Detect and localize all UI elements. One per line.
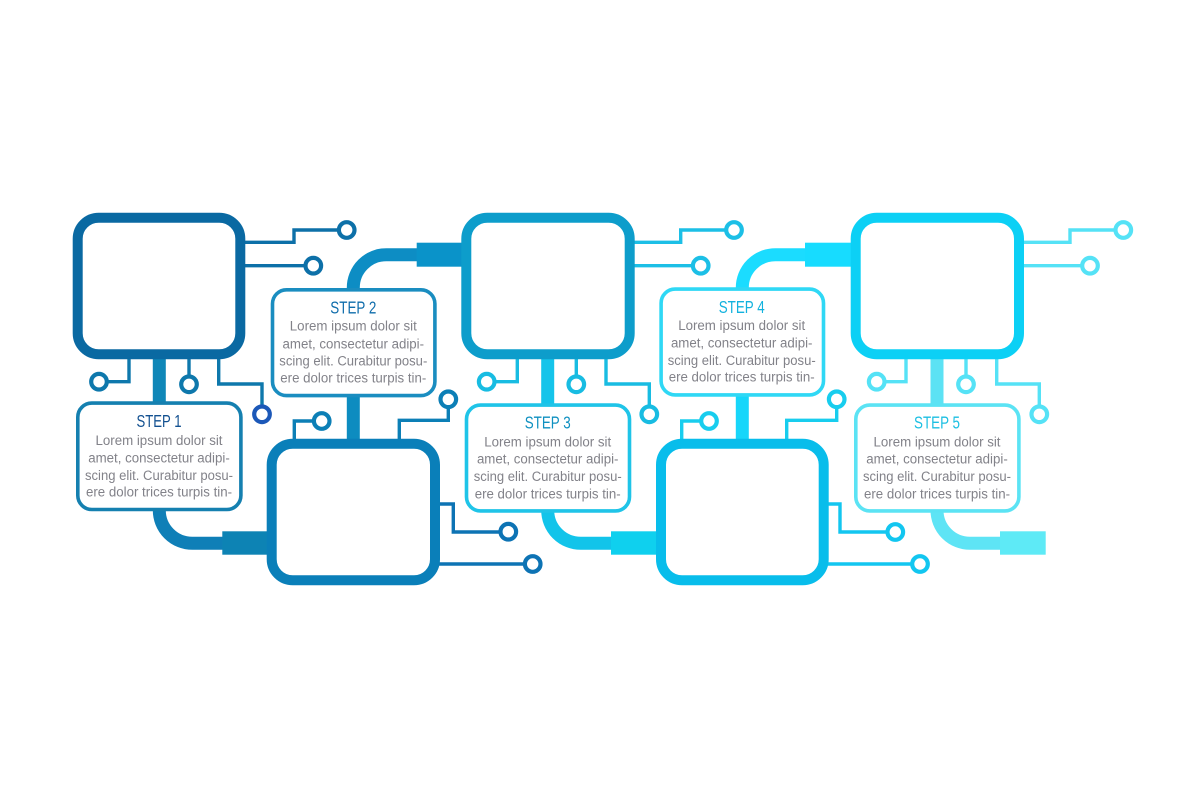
connector: box 5 down to step 5 [930,357,944,405]
plug: step 2 to box 3 [417,243,463,267]
circuit trace: box 4 right lower [827,556,928,572]
circuit trace: box 5 right lower [1022,258,1098,274]
body text: step 2: amet, consectetur adipi- [283,336,424,352]
image frame: box 5 [856,218,1019,354]
step 2 group [272,243,540,580]
connector: box 1 down to step 1 [153,357,166,403]
body text: step 2 [279,319,428,386]
plug: step 4 to box 5 [805,243,852,267]
body text: step 3: scing elit. Curabitur posu- [474,469,622,485]
body text: step 4: scing elit. Curabitur posu- [668,353,816,369]
heading: step 1: STEP 1 [136,411,182,431]
connector: step 4 curve to box 5 [742,255,807,290]
circuit trace: box 4 top left [682,413,717,440]
image frame: box 2 [272,444,435,580]
body text: step 4 [668,318,816,386]
text panel: step 3 [466,405,630,511]
body text: step 3: ere dolor trices turpis tin- [475,486,621,502]
body text: step 4: Lorem ipsum dolor sit [678,318,805,334]
connector: step 1 curve to box 2 [159,509,224,543]
circuit trace: box 1 bottom left [91,358,129,390]
body text: step 1 [85,433,233,501]
body text: step 1: amet, consectetur adipi- [88,451,230,467]
circuit trace: box 5 right upper [1022,222,1131,242]
step 5 group [856,218,1131,555]
body text: step 4: amet, consectetur adipi- [671,336,813,352]
body text: step 3: Lorem ipsum dolor sit [484,434,611,450]
plug: step 5 end [1000,531,1046,555]
image frame: box 3 [466,218,630,354]
text panel: step 1 [78,403,241,510]
body text: step 3: amet, consectetur adipi- [477,452,619,468]
heading: step 3: STEP 3 [525,413,571,433]
body text: step 5 [863,434,1011,502]
circuit trace: box 1 bottom right [219,358,270,422]
connector: step 2 curve to box 3 [353,255,419,290]
body text: step 4: ere dolor trices turpis tin- [669,370,815,386]
circuit trace: box 5 bottom middle [958,358,974,392]
circuit trace: box 4 top right [787,392,844,440]
body text: step 2: ere dolor trices turpis tin- [280,370,427,386]
heading: step 5: STEP 5 [914,413,960,433]
text panel: step 4 [661,289,824,395]
body text: step 3 [474,434,622,502]
circuit trace: box 5 bottom right [997,358,1047,422]
body text: step 2: Lorem ipsum dolor sit [290,319,417,335]
image frame: box 1 [78,218,240,354]
body text: step 5: ere dolor trices turpis tin- [864,486,1010,502]
plug: step 3 to box 4 [611,531,657,555]
body text: step 5: scing elit. Curabitur posu- [863,469,1011,485]
body text: step 1: Lorem ipsum dolor sit [96,433,223,449]
image frame: box 4 [661,444,824,580]
circuit trace: box 3 right upper [633,222,742,242]
circuit trace: box 1 right lower [244,258,321,274]
body text: step 1: ere dolor trices turpis tin- [86,485,232,501]
heading: step 4: STEP 4 [719,297,765,317]
circuit trace: box 2 top left [294,413,330,440]
circuit trace: box 3 bottom left [479,358,517,390]
step 3 group [466,218,742,555]
circuit trace: box 5 bottom left [869,358,906,390]
text panel: step 2 [272,290,435,396]
circuit trace: box 1 bottom middle [181,358,197,392]
connector: step 5 curve to end plug [937,510,1002,543]
connector: step 3 curve to box 4 [548,510,613,543]
heading: step 2: STEP 2 [330,298,376,318]
circuit trace: box 2 right upper [438,504,516,540]
connector: box 3 down to step 3 [541,357,554,405]
text panel: step 5 [856,405,1019,511]
step 4 group [661,243,928,580]
body text: step 1: scing elit. Curabitur posu- [85,468,233,484]
circuit trace: box 4 right upper [827,504,903,540]
body text: step 5: Lorem ipsum dolor sit [874,434,1001,450]
plug: step 1 to box 2 [222,531,268,555]
circuit trace: box 3 bottom right [606,358,657,422]
body text: step 2: scing elit. Curabitur posu- [279,354,428,370]
body text: step 5: amet, consectetur adipi- [866,452,1008,468]
connector: step 4 down to box 4 [736,395,749,441]
step 1 group [78,218,355,555]
circuit trace: box 2 top right [399,392,456,440]
connector: step 2 down to box 2 [347,396,360,441]
circuit trace: box 2 right lower [438,556,540,572]
circuit trace: box 3 bottom middle [568,358,584,392]
circuit trace: box 3 right lower [633,258,708,274]
circuit trace: box 1 right upper [244,222,355,242]
